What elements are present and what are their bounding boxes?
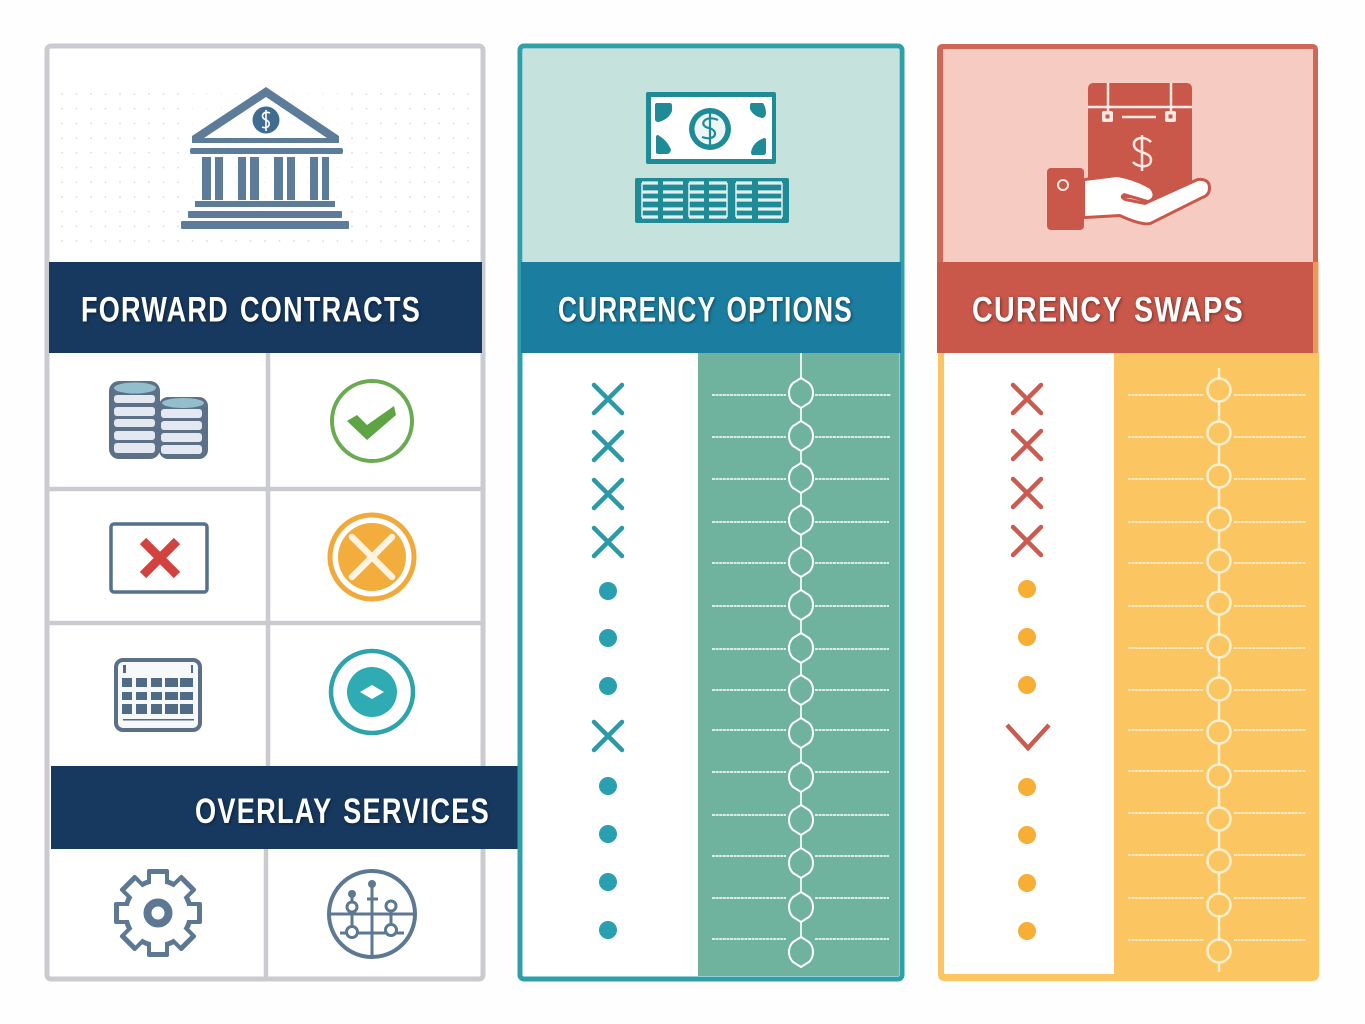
icon: red x box	[111, 524, 207, 592]
grid lines	[49, 353, 482, 978]
icon: orange x circle	[330, 515, 414, 599]
icon: globe network	[329, 871, 415, 957]
icon: bank building	[181, 87, 349, 232]
panel: currency options	[520, 46, 902, 979]
panel: forward contracts	[47, 46, 518, 979]
heading: forward contracts	[49, 262, 482, 353]
icon: teal target	[331, 651, 413, 733]
heading: forward contracts: FORWARD CONTRACTS	[81, 290, 421, 330]
heading: currency options	[521, 262, 901, 353]
heading: overlay services	[51, 766, 518, 849]
marks: currency options	[594, 385, 622, 939]
icon: hand holding dollar bag	[1047, 83, 1208, 230]
heading: currency options: CURRENCY OPTIONS	[558, 290, 853, 330]
icon: banknote and table	[635, 92, 789, 223]
heading: overlay services: OVERLAY SERVICES	[195, 792, 490, 831]
heading: currency swaps	[937, 262, 1313, 353]
marks: currency swaps	[1007, 385, 1049, 940]
timeline: currency swaps	[1128, 368, 1306, 972]
icon: gear	[114, 869, 202, 957]
panel: currency swaps	[937, 44, 1319, 981]
timeline: currency options	[712, 353, 891, 968]
icon: coin stacks	[109, 381, 208, 459]
icon: green check	[332, 381, 412, 461]
heading: currency swaps: CURENCY SWAPS	[972, 290, 1244, 330]
icon: calendar	[116, 660, 200, 730]
